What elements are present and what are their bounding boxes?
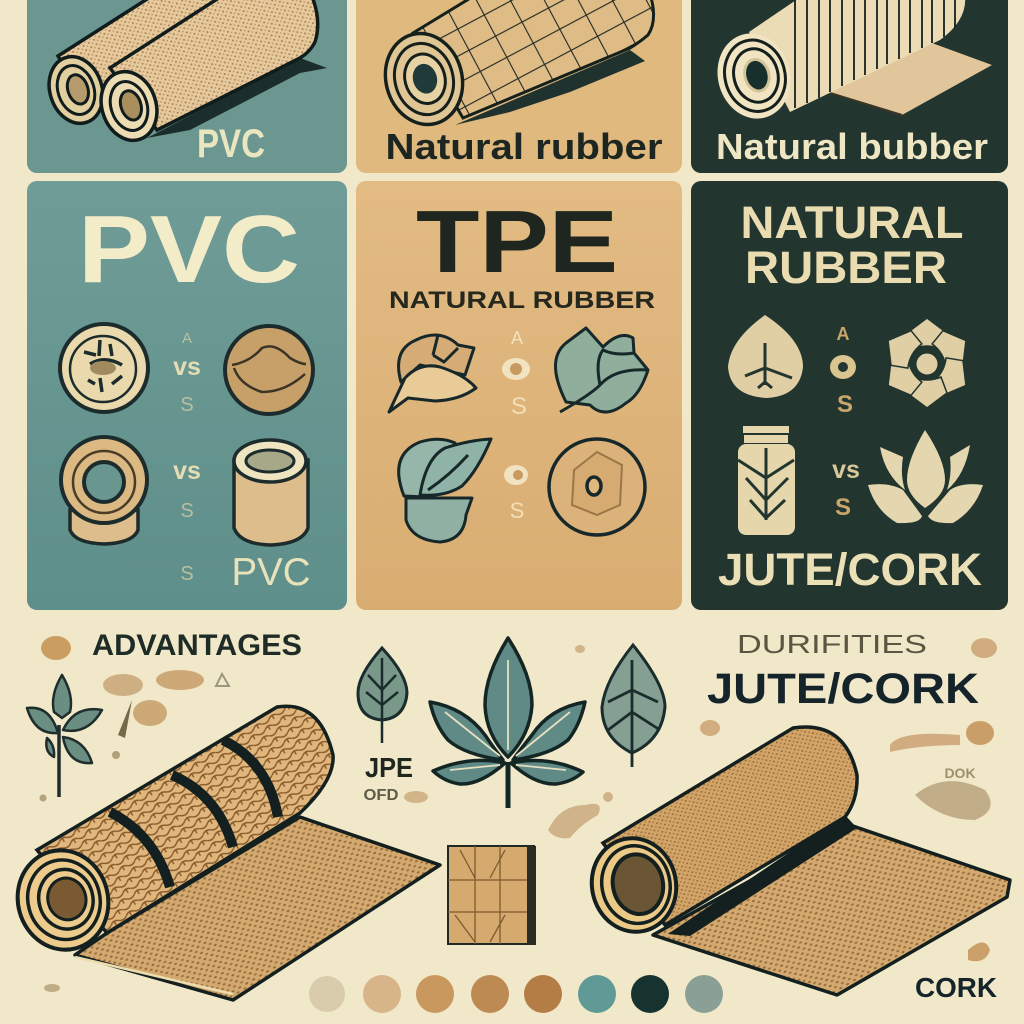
icon: plant sprig	[27, 675, 102, 797]
label: faint cork: DOK	[944, 765, 976, 781]
icons: separators: S	[837, 391, 853, 418]
heading: PVC: PVC	[78, 196, 300, 303]
icon: PVC double roll	[41, 0, 327, 148]
panel: top left PVC roll	[27, 0, 347, 173]
label: PVC: PVC	[197, 122, 265, 166]
large cork roll with mat	[583, 727, 1010, 995]
icons: swirl separators	[502, 328, 530, 523]
panel: PVC	[27, 181, 347, 610]
decorative speckles	[700, 638, 997, 961]
icons: separators	[830, 324, 856, 521]
decorative speckles	[404, 645, 613, 838]
label: TPE: JPE	[365, 752, 413, 783]
garbled marks between icons: S	[180, 563, 194, 585]
garbled marks between icons: S	[180, 394, 194, 416]
text: vs: vs	[832, 456, 860, 484]
label: Cork: CORK	[915, 972, 997, 1003]
section: centre leaves	[358, 638, 665, 945]
icons: swirl separators: S	[511, 393, 527, 420]
label: small caption: OFD	[364, 787, 398, 804]
icons: separators: S	[835, 494, 851, 521]
heading: TPE: TPE	[416, 192, 618, 291]
label: Jute/Cork: JUTE/CORK	[718, 544, 983, 595]
icon: round cross-section	[60, 324, 148, 412]
heading: Natural Rubber: NATURAL	[740, 197, 964, 248]
icon: leaf with branching	[728, 315, 803, 398]
panel: TPE	[356, 181, 682, 610]
icon: cannabis-style leaf	[430, 638, 585, 808]
heading: Jute/Cork: JUTE/CORK	[707, 665, 979, 713]
label: Natural rubber: NATURAL RUBBER	[389, 287, 655, 314]
icon: right leaf	[602, 645, 665, 767]
heading: Advantages: ADVANTAGES	[92, 629, 302, 662]
section: lower right Jute/Cork	[583, 629, 1010, 1003]
panel: Natural Rubber	[691, 181, 1008, 610]
label: PVC: PVC	[232, 551, 310, 594]
icon: flower	[878, 318, 976, 408]
icon: pale roll with sheet	[708, 0, 992, 127]
garbled marks between icons: S	[180, 500, 194, 522]
icons: swirl separators: S	[510, 498, 524, 523]
label: Natural bubber: Natural bubber	[716, 126, 988, 167]
icon: ring with tube	[61, 437, 147, 544]
icon: small leaf	[358, 648, 407, 743]
icon: cork square	[448, 846, 536, 945]
large roll with mat	[7, 706, 440, 1000]
icon: tan disc	[225, 326, 313, 414]
section: lower left advantages	[7, 629, 440, 1000]
icon: grid roll	[375, 0, 654, 133]
text: vs: vs	[173, 457, 201, 485]
icon: lotus	[868, 430, 983, 523]
heading: Natural Rubber	[740, 197, 964, 293]
heading: Natural Rubber: RUBBER	[745, 242, 947, 293]
icons: separators: A	[836, 324, 850, 344]
icon: jar	[738, 426, 795, 535]
colour palette dots	[309, 975, 723, 1013]
label: Natural rubber: Natural rubber	[386, 126, 662, 167]
garbled marks between icons: A	[182, 330, 192, 347]
icon: round disc	[549, 439, 645, 535]
icon: green leaf	[556, 328, 648, 412]
icon: outline leaf	[389, 335, 476, 412]
label: small heading: DURIFITIES	[737, 629, 927, 659]
icon: leaf in pot	[399, 439, 491, 542]
icon: cylinder	[234, 440, 308, 545]
icons: swirl separators: A	[511, 328, 523, 348]
panel: top right natural rubber roll	[691, 0, 1008, 173]
panel: top middle natural rubber roll	[356, 0, 682, 173]
garbled marks between icons	[180, 330, 194, 585]
text: vs: vs	[173, 353, 201, 381]
decorative speckles	[40, 636, 229, 992]
